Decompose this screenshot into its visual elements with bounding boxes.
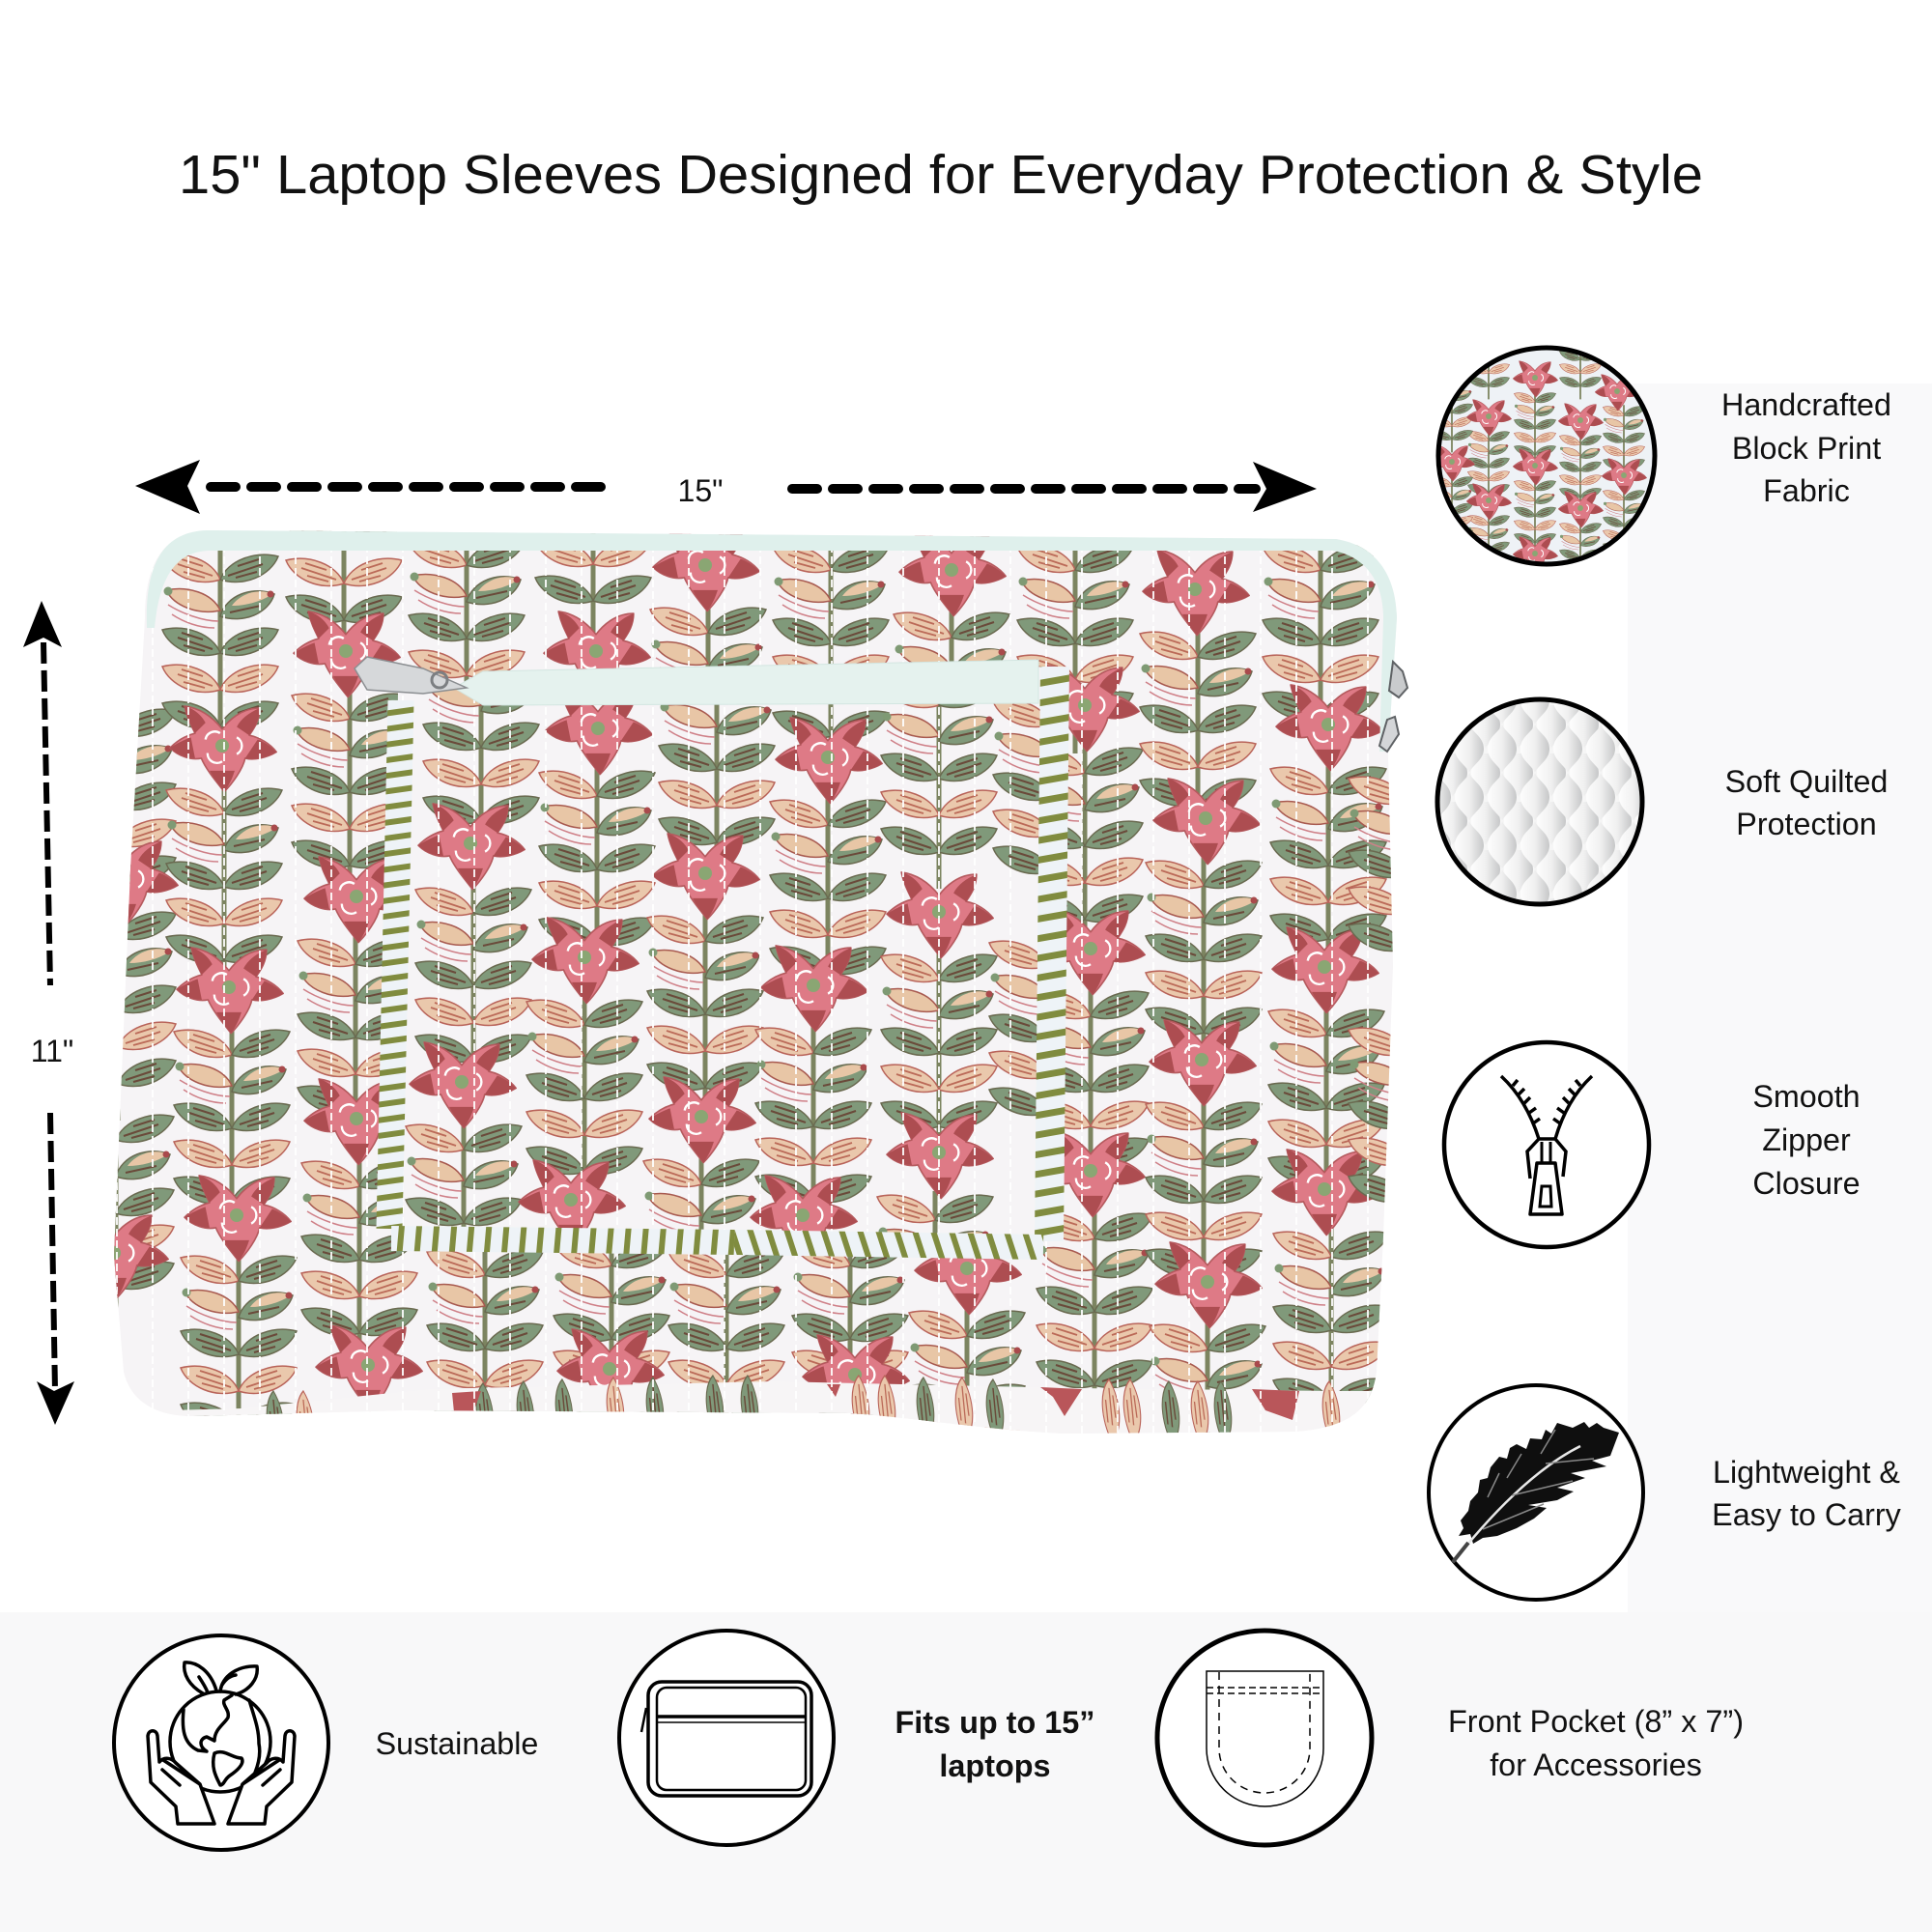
feature: lightweight <box>1429 1385 1902 1600</box>
height label: 11" <box>31 1034 73 1068</box>
feature: zipper closure <box>1444 1042 1861 1247</box>
label: Lightweight & <box>1713 1455 1900 1490</box>
label: Closure <box>1752 1166 1861 1201</box>
label: Front Pocket (8” x 7”) <box>1448 1704 1744 1739</box>
product: laptop sleeve <box>114 530 1408 1434</box>
quilt circle <box>1437 699 1642 904</box>
label: Fabric <box>1763 473 1850 508</box>
label: for Accessories <box>1490 1747 1702 1782</box>
sleeve zipper puller <box>1379 662 1407 752</box>
pocket zipper tape <box>454 660 1038 705</box>
feature: sustainable <box>114 1635 538 1850</box>
arrow: height top <box>23 601 62 985</box>
label: Zipper <box>1762 1122 1851 1157</box>
feature: block print fabric <box>1435 346 1889 566</box>
pocket panel <box>391 667 1040 1236</box>
feature: fits laptops <box>619 1631 1094 1845</box>
label: Sustainable <box>376 1726 538 1761</box>
icon: globe in hands <box>114 1635 328 1850</box>
fold strip at bottom <box>183 1375 1372 1434</box>
label: Soft Quilted <box>1725 764 1888 799</box>
back panel vines <box>58 425 1464 1533</box>
arrow: height bottom <box>37 1113 74 1425</box>
icon: zipper <box>1444 1042 1649 1247</box>
icon: feather <box>1429 1385 1643 1600</box>
panel: right features background <box>1628 384 1932 1612</box>
icon: sleeve <box>619 1631 834 1845</box>
label: Handcrafted <box>1721 387 1891 422</box>
icon: pocket <box>1157 1631 1372 1845</box>
title: 15" Laptop Sleeves Designed for Everyday Protection & Style <box>179 144 1703 206</box>
feature: quilted protection <box>1437 699 1888 904</box>
panel: bottom features background <box>0 1612 1932 1932</box>
label: Block Print <box>1732 431 1881 466</box>
arrow: width left <box>135 460 607 514</box>
arrow: width right <box>792 462 1317 512</box>
feature: front pocket <box>1157 1631 1744 1845</box>
label: laptops <box>939 1748 1051 1783</box>
swatch circle <box>1435 346 1658 566</box>
pocket striped trim <box>389 667 1055 1247</box>
sleeve zipper tape <box>147 530 1397 752</box>
label: Protection <box>1736 807 1877 841</box>
label: Easy to Carry <box>1712 1497 1902 1532</box>
pocket zipper puller <box>355 657 467 694</box>
label: Smooth <box>1752 1079 1861 1114</box>
width label: 15" <box>678 473 723 508</box>
sleeve fabric body <box>114 531 1393 1434</box>
label: Fits up to 15” <box>895 1705 1094 1740</box>
